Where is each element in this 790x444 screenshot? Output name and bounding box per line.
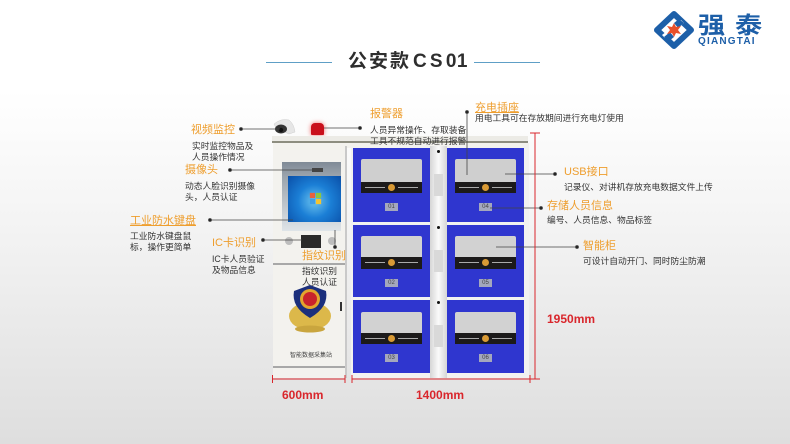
locker door 05 — [447, 225, 524, 297]
description: 人员认证 — [302, 277, 337, 287]
logo wordmark: 强泰 — [698, 12, 772, 38]
kiosk upper band — [273, 143, 529, 148]
door 03 badge — [388, 335, 395, 342]
dimension: 1950mm: 1950mm — [547, 312, 595, 326]
door 06 number — [479, 354, 492, 362]
locker door 02 — [353, 225, 430, 297]
description: 记录仪、对讲机存放充电数据文件上传 — [564, 182, 713, 192]
logo mark — [654, 11, 694, 49]
description: 工具不规范自动进行报警 — [370, 136, 466, 146]
door 02 black band — [361, 257, 422, 269]
heading: 摄像头 — [185, 164, 218, 176]
description — [185, 181, 255, 202]
door 03 black band — [361, 333, 422, 344]
door 03 gray panel — [361, 312, 422, 333]
door 04 black band — [455, 182, 516, 193]
description: 动态人脸识别摄像 — [185, 181, 255, 191]
kiosk camera slot — [312, 168, 323, 172]
heading: 工业防水键盘 — [130, 215, 196, 227]
door 03 number: 03 — [388, 355, 395, 361]
description: 实时监控物品及 — [192, 141, 253, 151]
kiosk body — [273, 146, 347, 378]
kiosk screen housing — [282, 162, 341, 231]
door 06 badge — [482, 335, 489, 342]
logo latin: QIANGTAI — [698, 36, 756, 47]
strip vent 1 — [434, 174, 443, 196]
logo — [650, 8, 770, 52]
description — [302, 266, 337, 287]
strip vent 3 — [434, 325, 443, 347]
callout: USB port — [564, 166, 713, 192]
locker door 04 — [447, 148, 524, 222]
door 05 gray panel — [455, 236, 516, 257]
door 03 band text lines — [361, 338, 422, 339]
description: 用电工具可在存放期间进行充电灯使用 — [475, 113, 624, 123]
description — [130, 231, 191, 252]
door 05 black band — [455, 257, 516, 269]
door 01 number — [385, 203, 398, 211]
strip dot 2 — [437, 226, 440, 229]
description: IC卡人员验证 — [212, 254, 264, 264]
heading: USB接口 — [564, 166, 609, 178]
windows logo — [310, 192, 322, 204]
strip dot 3 — [437, 301, 440, 304]
door 04 number: 04 — [482, 204, 489, 210]
description: 可设计自动开门、同时防尘防潮 — [583, 256, 706, 266]
cabinet top cap — [272, 136, 528, 143]
door 03 number — [385, 354, 398, 362]
door 02 band text lines — [361, 262, 422, 263]
strip vent 2 — [434, 250, 443, 272]
description: 人员操作情况 — [192, 152, 244, 162]
heading: 报警器 — [370, 108, 403, 120]
description — [192, 141, 253, 162]
description: 人员异常操作、存取装备 — [370, 125, 466, 135]
icon: red alarm light — [311, 123, 324, 135]
kiosk divider upper — [273, 263, 345, 265]
kiosk divider lower — [273, 366, 345, 368]
description: 编号、人员信息、物品标签 — [547, 215, 652, 225]
door 06 number: 06 — [482, 355, 489, 361]
door 05 number — [479, 279, 492, 287]
door 01 number: 01 — [388, 204, 395, 210]
door 06 gray panel — [455, 312, 516, 333]
locker door 03 — [353, 300, 430, 373]
door 02 gray panel — [361, 236, 422, 257]
title rule left — [266, 62, 332, 63]
kiosk side latch — [340, 302, 342, 311]
callout: personnel info — [547, 200, 652, 225]
dimension: 1400mm: 1400mm — [416, 388, 464, 402]
callout: smart cabinet — [583, 240, 706, 266]
heading: 智能柜 — [583, 240, 616, 252]
callout: charging socket — [475, 102, 624, 123]
kiosk card reader — [301, 235, 321, 248]
description: 工业防水键盘鼠 — [130, 231, 191, 241]
heading: IC卡识别 — [212, 237, 256, 249]
door 02 badge — [388, 259, 395, 266]
locker body — [351, 146, 529, 378]
cabinet illustration — [272, 119, 529, 378]
description: 指纹识别 — [302, 266, 337, 276]
callout: video monitoring — [191, 124, 253, 162]
door 04 band text lines — [455, 187, 516, 188]
door 04 number — [479, 203, 492, 211]
strip dot 1 — [437, 150, 440, 153]
dimension: 600mm: 600mm — [282, 388, 323, 402]
description: 头，人员认证 — [185, 192, 238, 202]
title text: 公安款CS01 — [348, 51, 468, 72]
title rule right — [474, 62, 540, 63]
kiosk button left — [285, 237, 293, 245]
door 05 badge — [482, 259, 489, 266]
door 04 gray panel — [455, 159, 516, 182]
kiosk name plate: 智能数据采集站 — [290, 353, 332, 359]
description: 标，操作更简单 — [130, 242, 191, 252]
door 01 gray panel — [361, 159, 422, 182]
center strip — [430, 146, 447, 378]
heading: 充电插座 — [475, 102, 519, 114]
door 06 band text lines — [455, 338, 516, 339]
door 01 badge — [388, 184, 395, 191]
door 02 number — [385, 279, 398, 287]
door 02 number: 02 — [388, 280, 395, 286]
door 01 band text lines — [361, 187, 422, 188]
callout: alarm — [370, 108, 466, 146]
callout: keyboard — [130, 214, 196, 252]
icon: police emblem — [289, 285, 331, 332]
door 04 badge — [482, 184, 489, 191]
locker door 01 — [353, 148, 430, 222]
callout: camera — [185, 164, 255, 202]
heading: 视频监控 — [191, 124, 235, 136]
door 05 band text lines — [455, 262, 516, 263]
door 01 black band — [361, 182, 422, 193]
callout: IC card — [212, 236, 264, 275]
heading: 指纹识别 — [302, 250, 346, 262]
callout: fingerprint — [302, 250, 346, 287]
icon: dome camera — [274, 119, 296, 134]
heading: 存储人员信息 — [547, 200, 613, 212]
door 05 number: 05 — [482, 280, 489, 286]
kiosk button right — [328, 237, 336, 245]
description — [370, 125, 466, 146]
door 06 black band — [455, 333, 516, 344]
description — [212, 254, 264, 275]
locker door 06 — [447, 300, 524, 373]
description: 及物品信息 — [212, 265, 256, 275]
kiosk screen — [288, 176, 341, 222]
